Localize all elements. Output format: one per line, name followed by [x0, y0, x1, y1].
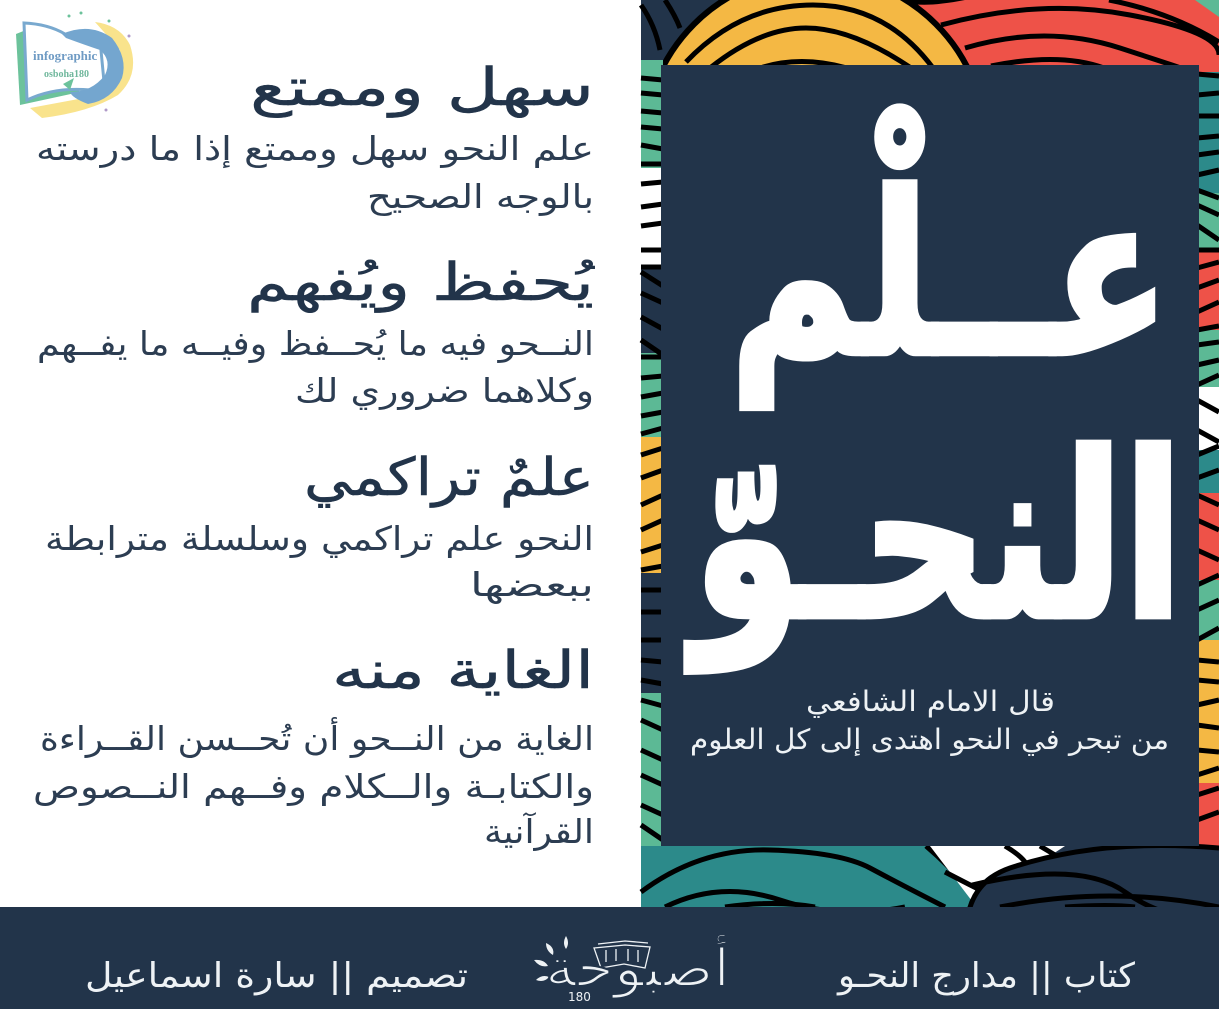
section: memorised and understood: وكلاهما ضروري لك — [295, 371, 594, 410]
pattern: bottom white wedge — [930, 846, 1065, 905]
icon: sun rays — [534, 936, 568, 981]
logo: infographic osboha180 — [16, 12, 133, 118]
pattern: left strip — [641, 60, 663, 846]
pattern: top yellow arcs — [644, 0, 986, 316]
section: cumulative science: النحو علم تراكمي وسلسلة مترابطة — [45, 519, 594, 558]
pattern: bottom teal arcs — [641, 846, 985, 912]
footer: book credit: كتاب || مدارج النحـو — [836, 956, 1136, 996]
quote: Imam Shafi'i: من تبحر في النحو اهتدى إلى كل العلوم — [690, 723, 1169, 756]
quote: Imam Shafi'i — [690, 685, 1169, 756]
logo: infographic osboha180: infographic — [33, 48, 98, 63]
section: cumulative science: ببعضها — [470, 565, 594, 604]
section: the goal: والكتابـة والــكلام وفــهم النــصوص — [33, 767, 594, 807]
section: memorised and understood: يُحفظ ويُفهم — [247, 253, 595, 313]
footer: designer credit: تصميم || سارة اسماعيل — [85, 956, 468, 996]
pattern: right strip — [1197, 60, 1219, 846]
section: cumulative science: علمٌ تراكمي — [304, 448, 594, 508]
footer bar — [0, 907, 1219, 1009]
pattern: top red waves — [900, 0, 1219, 69]
section: the goal: الغاية من النــحو أن تُحــسن القــراءة — [40, 717, 594, 758]
section: the goal: القرآنية — [484, 812, 594, 851]
pattern: bottom navy arcs — [968, 846, 1219, 917]
section: memorised and understood — [37, 253, 595, 410]
icon: open book — [594, 941, 650, 968]
section: easy and enjoyable: سهل وممتع — [250, 58, 594, 118]
quote: Imam Shafi'i: قال الامام الشافعي — [806, 685, 1055, 718]
section: easy and enjoyable: علم النحو سهل وممتع إذا ما درسته — [36, 129, 594, 169]
title: علم النحو — [685, 106, 1183, 672]
section: easy and enjoyable: بالوجه الصحيح — [367, 177, 594, 216]
title word: علم: عــلْم — [730, 106, 1170, 408]
logo: infographic osboha180: osboha180 — [44, 69, 89, 80]
section: memorised and understood: النــحو فيه ما يُحــفظ وفيــه ما يفــهم — [37, 324, 594, 363]
panel: decorative patterned background — [641, 0, 1219, 917]
section: cumulative science — [45, 448, 594, 604]
logo: osboha 180: 180 — [568, 990, 591, 1004]
logo: osboha 180: أصبوحة — [545, 933, 730, 999]
pattern: top left navy corner arcs — [641, 0, 680, 50]
section: the goal — [33, 641, 594, 851]
section: easy and enjoyable — [36, 58, 594, 216]
title word: النحو: النحـوّ — [685, 405, 1183, 672]
logo: osboha 180 — [534, 933, 730, 1004]
section: the goal: الغاية منه — [332, 641, 594, 701]
panel: navy title card — [661, 65, 1199, 846]
